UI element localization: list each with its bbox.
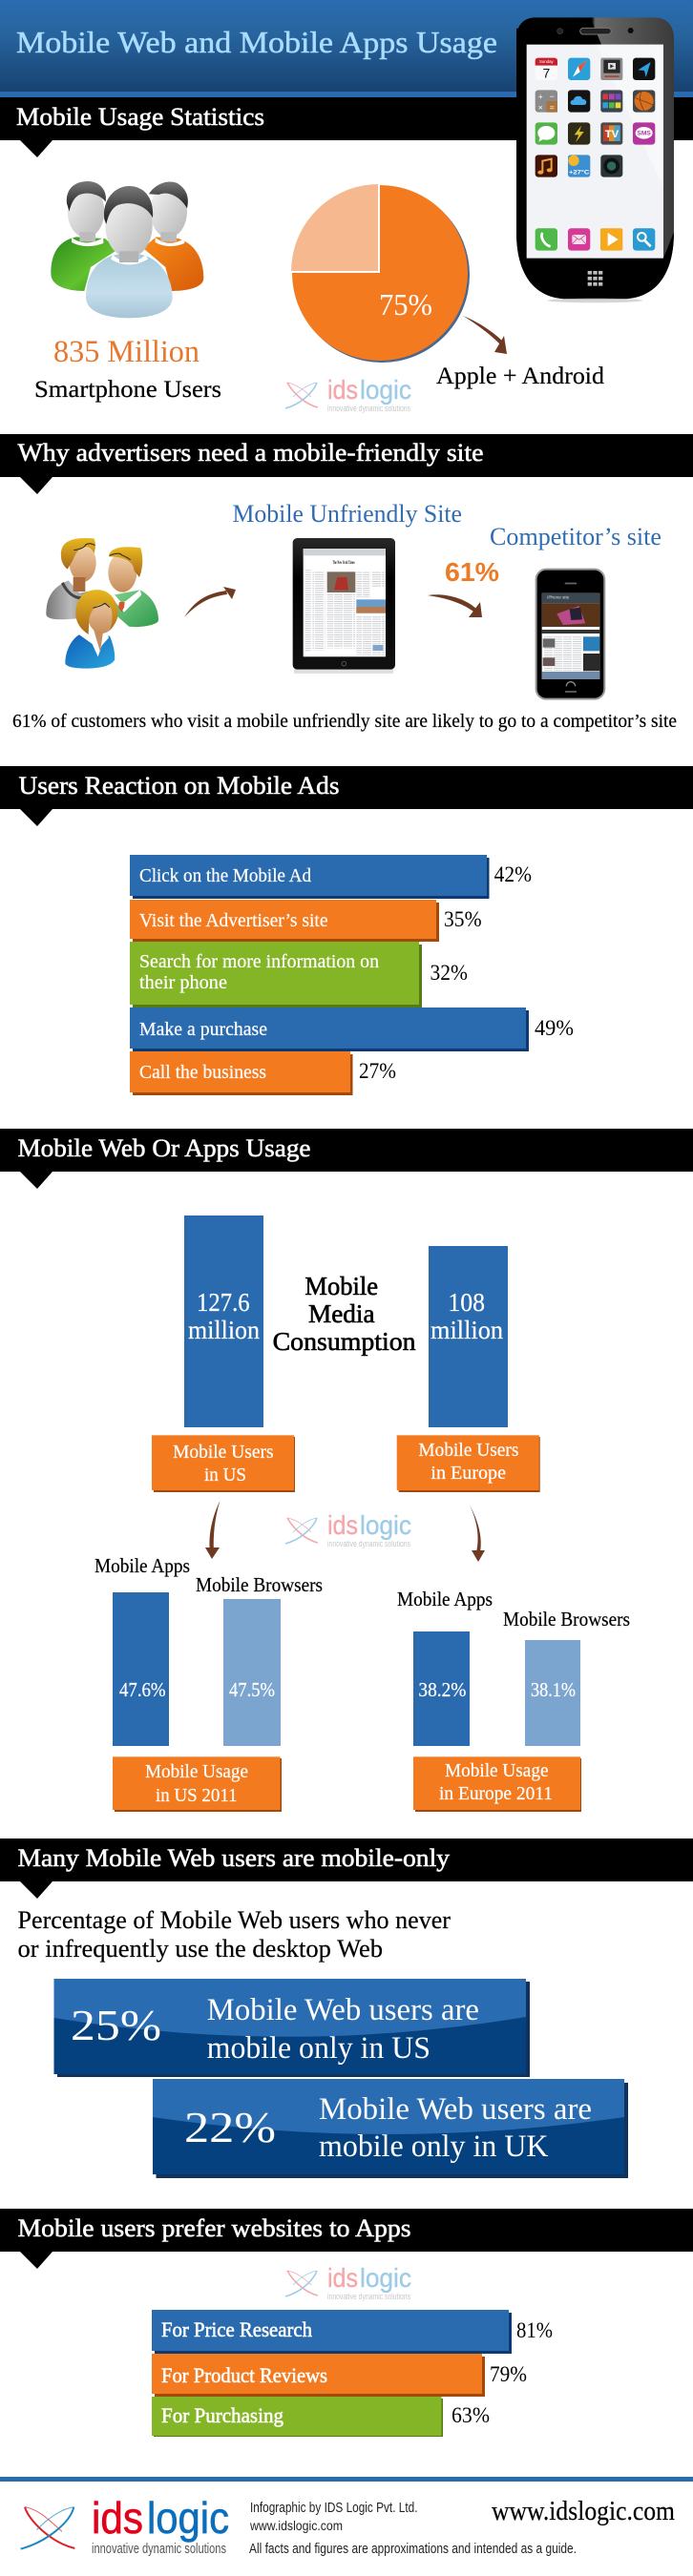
label: Mobile Unfriendly Site: Mobile Unfriendly Site	[233, 500, 462, 528]
bar: 108 million Europe: million	[430, 1316, 503, 1344]
heading: Mobile Media Consumption: Media	[308, 1299, 375, 1328]
bar: Make a purchase 49%: Make a purchase	[139, 1019, 267, 1040]
text: percentage of mobile web users	[17, 1906, 451, 1963]
text: percentage of mobile web users: Percentage of Mobile Web users who never	[17, 1906, 451, 1934]
bar: apps 38.2%	[413, 1631, 470, 1746]
footer rule	[0, 2477, 693, 2482]
bar: For Purchasing 63%	[152, 2397, 490, 2437]
section heading: Why advertisers need a mobile-friendly site	[0, 434, 693, 494]
box: Mobile Users in US: in US	[204, 1465, 246, 1485]
header banner	[0, 0, 693, 92]
bar: Call the business 27%: Call the business	[139, 1062, 266, 1083]
icon: weather: +27°C	[569, 169, 590, 177]
icon: search	[633, 228, 655, 251]
watermark logo 3: innovative dynamic solutions	[327, 2292, 410, 2301]
watermark logo 2: logic	[360, 1510, 411, 1540]
label: Smartphone Users: Smartphone Users	[34, 377, 221, 403]
icon: smartphone users group	[51, 181, 203, 318]
icon: video	[600, 58, 622, 80]
footer logo: innovative dynamic solutions	[92, 2541, 226, 2557]
watermark logo 2: ids	[327, 1510, 358, 1540]
bar: 127.6 million US: million	[188, 1316, 260, 1344]
section heading: Mobile Web Or Apps Usage	[0, 1129, 693, 1189]
icon: mail	[568, 228, 590, 251]
bar: Visit the Advertiser's site 35%: 35%	[444, 907, 482, 931]
footer credit: Infographic by IDS Logic Pvt. Ltd.	[250, 2500, 418, 2516]
label: Mobile Apps US: Mobile Apps	[94, 1554, 190, 1577]
callout: 25% mobile only in US: Mobile Web users are	[207, 1993, 479, 2027]
watermark logo 1: logic	[360, 375, 411, 405]
icon: tablet with newspaper site	[293, 538, 395, 674]
icon: camera	[600, 155, 622, 177]
bar: Search for more information 32%: their phone	[139, 972, 227, 993]
icon: cloud	[568, 90, 590, 113]
icon: weather	[568, 155, 590, 177]
section heading: Mobile Web Or Apps Usage: Mobile Web Or Apps Usage	[17, 1134, 311, 1162]
icon: phone	[536, 228, 557, 251]
bar: apps 38.2%: 38.2%	[418, 1678, 466, 1701]
bar: For Product Reviews 79%	[152, 2354, 527, 2397]
icon: calendar	[536, 58, 557, 80]
bar: Search for more information 32%: 32%	[430, 961, 468, 985]
watermark logo 1: ids	[327, 375, 358, 405]
footer credit: www.idslogic.com	[249, 2518, 343, 2533]
section heading: Many Mobile Web users are mobile-only	[0, 1839, 693, 1899]
bar: Call the business 27%	[130, 1051, 396, 1095]
arrow: US users to usage	[205, 1501, 220, 1559]
icon: basketball	[633, 90, 655, 113]
icon: TV	[600, 122, 622, 145]
icon: calculator: +	[538, 92, 543, 101]
section heading: Mobile Usage Statistics: Mobile Usage Statistics	[16, 103, 264, 131]
section heading: Users Reaction on Mobile Ads	[0, 766, 693, 826]
callout: 22% mobile only in UK: Mobile Web users are	[319, 2092, 592, 2127]
pie chart: 75%: 75%	[379, 287, 432, 322]
header accent strip	[0, 92, 693, 97]
section heading: Why advertisers need a mobile-friendly site: Why advertisers need a mobile-friendly site	[17, 439, 484, 467]
watermark logo 3: logic	[360, 2263, 411, 2293]
box: Mobile Users in Europe: Mobile Users	[418, 1440, 519, 1461]
bar: browsers 47.5%: 47.5%	[229, 1678, 275, 1701]
box: Mobile Usage in Europe 2011: Mobile Usage	[445, 1760, 549, 1781]
section heading: Mobile users prefer websites to Apps	[0, 2209, 693, 2269]
chart: mobile usage in US 2011	[94, 1554, 323, 1812]
icon: calculator	[536, 90, 557, 113]
arrow: unfriendly site to competitor	[428, 594, 482, 617]
bar: 127.6 million US	[184, 1215, 263, 1427]
footer credit	[249, 2500, 577, 2557]
section heading: Users Reaction on Mobile Ads: Users Reaction on Mobile Ads	[19, 772, 339, 800]
icon: SMS	[633, 122, 655, 145]
bar: Search for more information 32%	[130, 942, 468, 1008]
arrow: customers to unfriendly site	[184, 587, 236, 617]
section heading: Mobile Usage Statistics	[0, 97, 693, 157]
icon: calculator: =	[550, 102, 555, 112]
callout: 22% mobile only in UK: mobile only in UK	[319, 2129, 549, 2164]
icon: SMS: SMS	[637, 131, 651, 137]
watermark logo 2: innovative dynamic solutions	[327, 1539, 410, 1548]
section heading: Mobile users prefer websites to Apps: Mobile users prefer websites to Apps	[17, 2214, 410, 2242]
icon: music	[536, 155, 557, 177]
icon: navigation	[633, 58, 655, 80]
bar: 108 million Europe	[429, 1246, 508, 1427]
section heading: Many Mobile Web users are mobile-only: Many Mobile Web users are mobile-only	[17, 1844, 450, 1872]
footer website: www.idslogic.com	[492, 2496, 675, 2526]
watermark logo 3: ids	[327, 2263, 358, 2293]
icon: calculator: −	[550, 92, 555, 101]
box: Mobile Usage in US 2011: Mobile Usage	[145, 1761, 248, 1782]
bar: Click on the Mobile Ad 42%: 42%	[494, 862, 532, 886]
bar: Click on the Mobile Ad 42%	[130, 855, 532, 899]
footer logo: logic	[147, 2493, 229, 2543]
icon: play	[600, 228, 622, 251]
footer logo	[21, 2493, 229, 2557]
icon: lightning	[568, 122, 590, 145]
box: Mobile Users in Europe	[397, 1435, 540, 1492]
label: Competitor's site: Competitor’s site	[490, 523, 662, 551]
bar: For Product Reviews 79%: For Product Reviews	[161, 2363, 327, 2387]
bar: For Price Research 81%: For Price Research	[161, 2317, 312, 2341]
icon: customers group	[46, 538, 158, 669]
icon: messages	[536, 122, 557, 145]
box: Mobile Users in US: Mobile Users	[173, 1442, 274, 1463]
heading: Mobile Media Consumption: Mobile	[304, 1272, 378, 1300]
bar: For Price Research 81%: 81%	[516, 2318, 553, 2342]
icon: colour grid	[600, 90, 622, 113]
callout: 25% mobile only in US: 25%	[71, 2001, 161, 2049]
icon: phone with competitor site	[536, 570, 604, 699]
watermark logo 1: innovative dynamic solutions	[327, 404, 410, 413]
footer logo: ids	[92, 2493, 143, 2543]
box: Mobile Usage in US 2011	[113, 1756, 282, 1812]
pie chart: 75%	[291, 184, 470, 363]
watermark logo 2	[285, 1510, 411, 1548]
bar: Make a purchase 49%: 49%	[535, 1016, 574, 1040]
arrow: Europe users to usage	[470, 1505, 485, 1562]
bar: Search for more information 32%: Search for more information on	[139, 951, 379, 972]
box: Mobile Usage in Europe 2011: in Europe 2011	[439, 1783, 553, 1804]
bar: browsers 38.1%: 38.1%	[531, 1678, 576, 1701]
box: Mobile Usage in Europe 2011	[413, 1756, 581, 1812]
heading: Mobile Media Consumption	[273, 1272, 416, 1356]
chart: mobile usage in Europe 2011	[397, 1588, 630, 1812]
callout: 25% mobile only in US: mobile only in US	[207, 2031, 430, 2066]
heading: Mobile Media Consumption: Consumption	[273, 1327, 416, 1356]
bar: For Price Research 81%	[152, 2310, 553, 2354]
bar: For Product Reviews 79%: 79%	[490, 2362, 527, 2386]
icon: TV: TV	[605, 129, 620, 140]
icon: calendar: 7	[542, 65, 550, 80]
smartphone illustration	[516, 17, 674, 302]
callout: 22% mobile only in UK: 22%	[184, 2103, 276, 2151]
bar: For Purchasing 63%: For Purchasing	[161, 2403, 284, 2427]
box: Mobile Users in Europe: in Europe	[430, 1463, 506, 1484]
bar: 108 million Europe: 108	[448, 1288, 485, 1317]
text: percentage of mobile web users: or infrequently use the desktop Web	[17, 1935, 383, 1963]
box: Mobile Users in US	[152, 1435, 295, 1492]
icon: calculator: ×	[538, 102, 543, 112]
bar: browsers 47.5%	[223, 1599, 281, 1746]
box: Mobile Usage in US 2011: in US 2011	[156, 1785, 238, 1806]
bar: 127.6 million US: 127.6	[197, 1288, 250, 1317]
bar: Visit the Advertiser's site 35%: Visit the Advertiser’s site	[139, 910, 328, 931]
bar: Call the business 27%: 27%	[359, 1059, 396, 1083]
statistic: 61%: 61%	[445, 557, 499, 587]
title: Mobile Web and Mobile Apps Usage	[16, 25, 497, 59]
icon: calendar: Sunday	[539, 59, 555, 64]
footer credit: All facts and figures are approximations and intended as a guide.	[249, 2541, 577, 2557]
label: Apple + Android: Apple + Android	[436, 364, 605, 389]
icon: compass	[568, 58, 590, 80]
icon: tablet with newspaper site: The New York Times	[332, 560, 355, 566]
bar: apps 47.6%	[113, 1592, 169, 1746]
bar: Click on the Mobile Ad 42%: Click on the Mobile Ad	[139, 865, 311, 886]
bar: browsers 38.1%	[525, 1640, 580, 1746]
label: Mobile Browsers US: Mobile Browsers	[196, 1573, 323, 1596]
arrow to Apple + Android	[463, 316, 507, 354]
bar: Visit the Advertiser's site 35%	[130, 900, 482, 942]
callout: 22% mobile only in UK	[153, 2079, 628, 2178]
watermark logo 1	[285, 375, 411, 413]
statistic: 835 Million: 835 Million	[53, 335, 200, 369]
label: Mobile Apps Europe: Mobile Apps	[397, 1588, 493, 1610]
bar: For Purchasing 63%: 63%	[452, 2403, 490, 2427]
bar: Make a purchase 49%	[130, 1008, 574, 1051]
callout: 25% mobile only in US	[53, 1979, 530, 2077]
watermark logo 3	[285, 2263, 411, 2301]
bar: apps 47.6%: 47.6%	[119, 1678, 166, 1701]
label: Mobile Browsers Europe: Mobile Browsers	[503, 1608, 630, 1631]
icon: phone with competitor site: iPhone site	[547, 595, 570, 600]
